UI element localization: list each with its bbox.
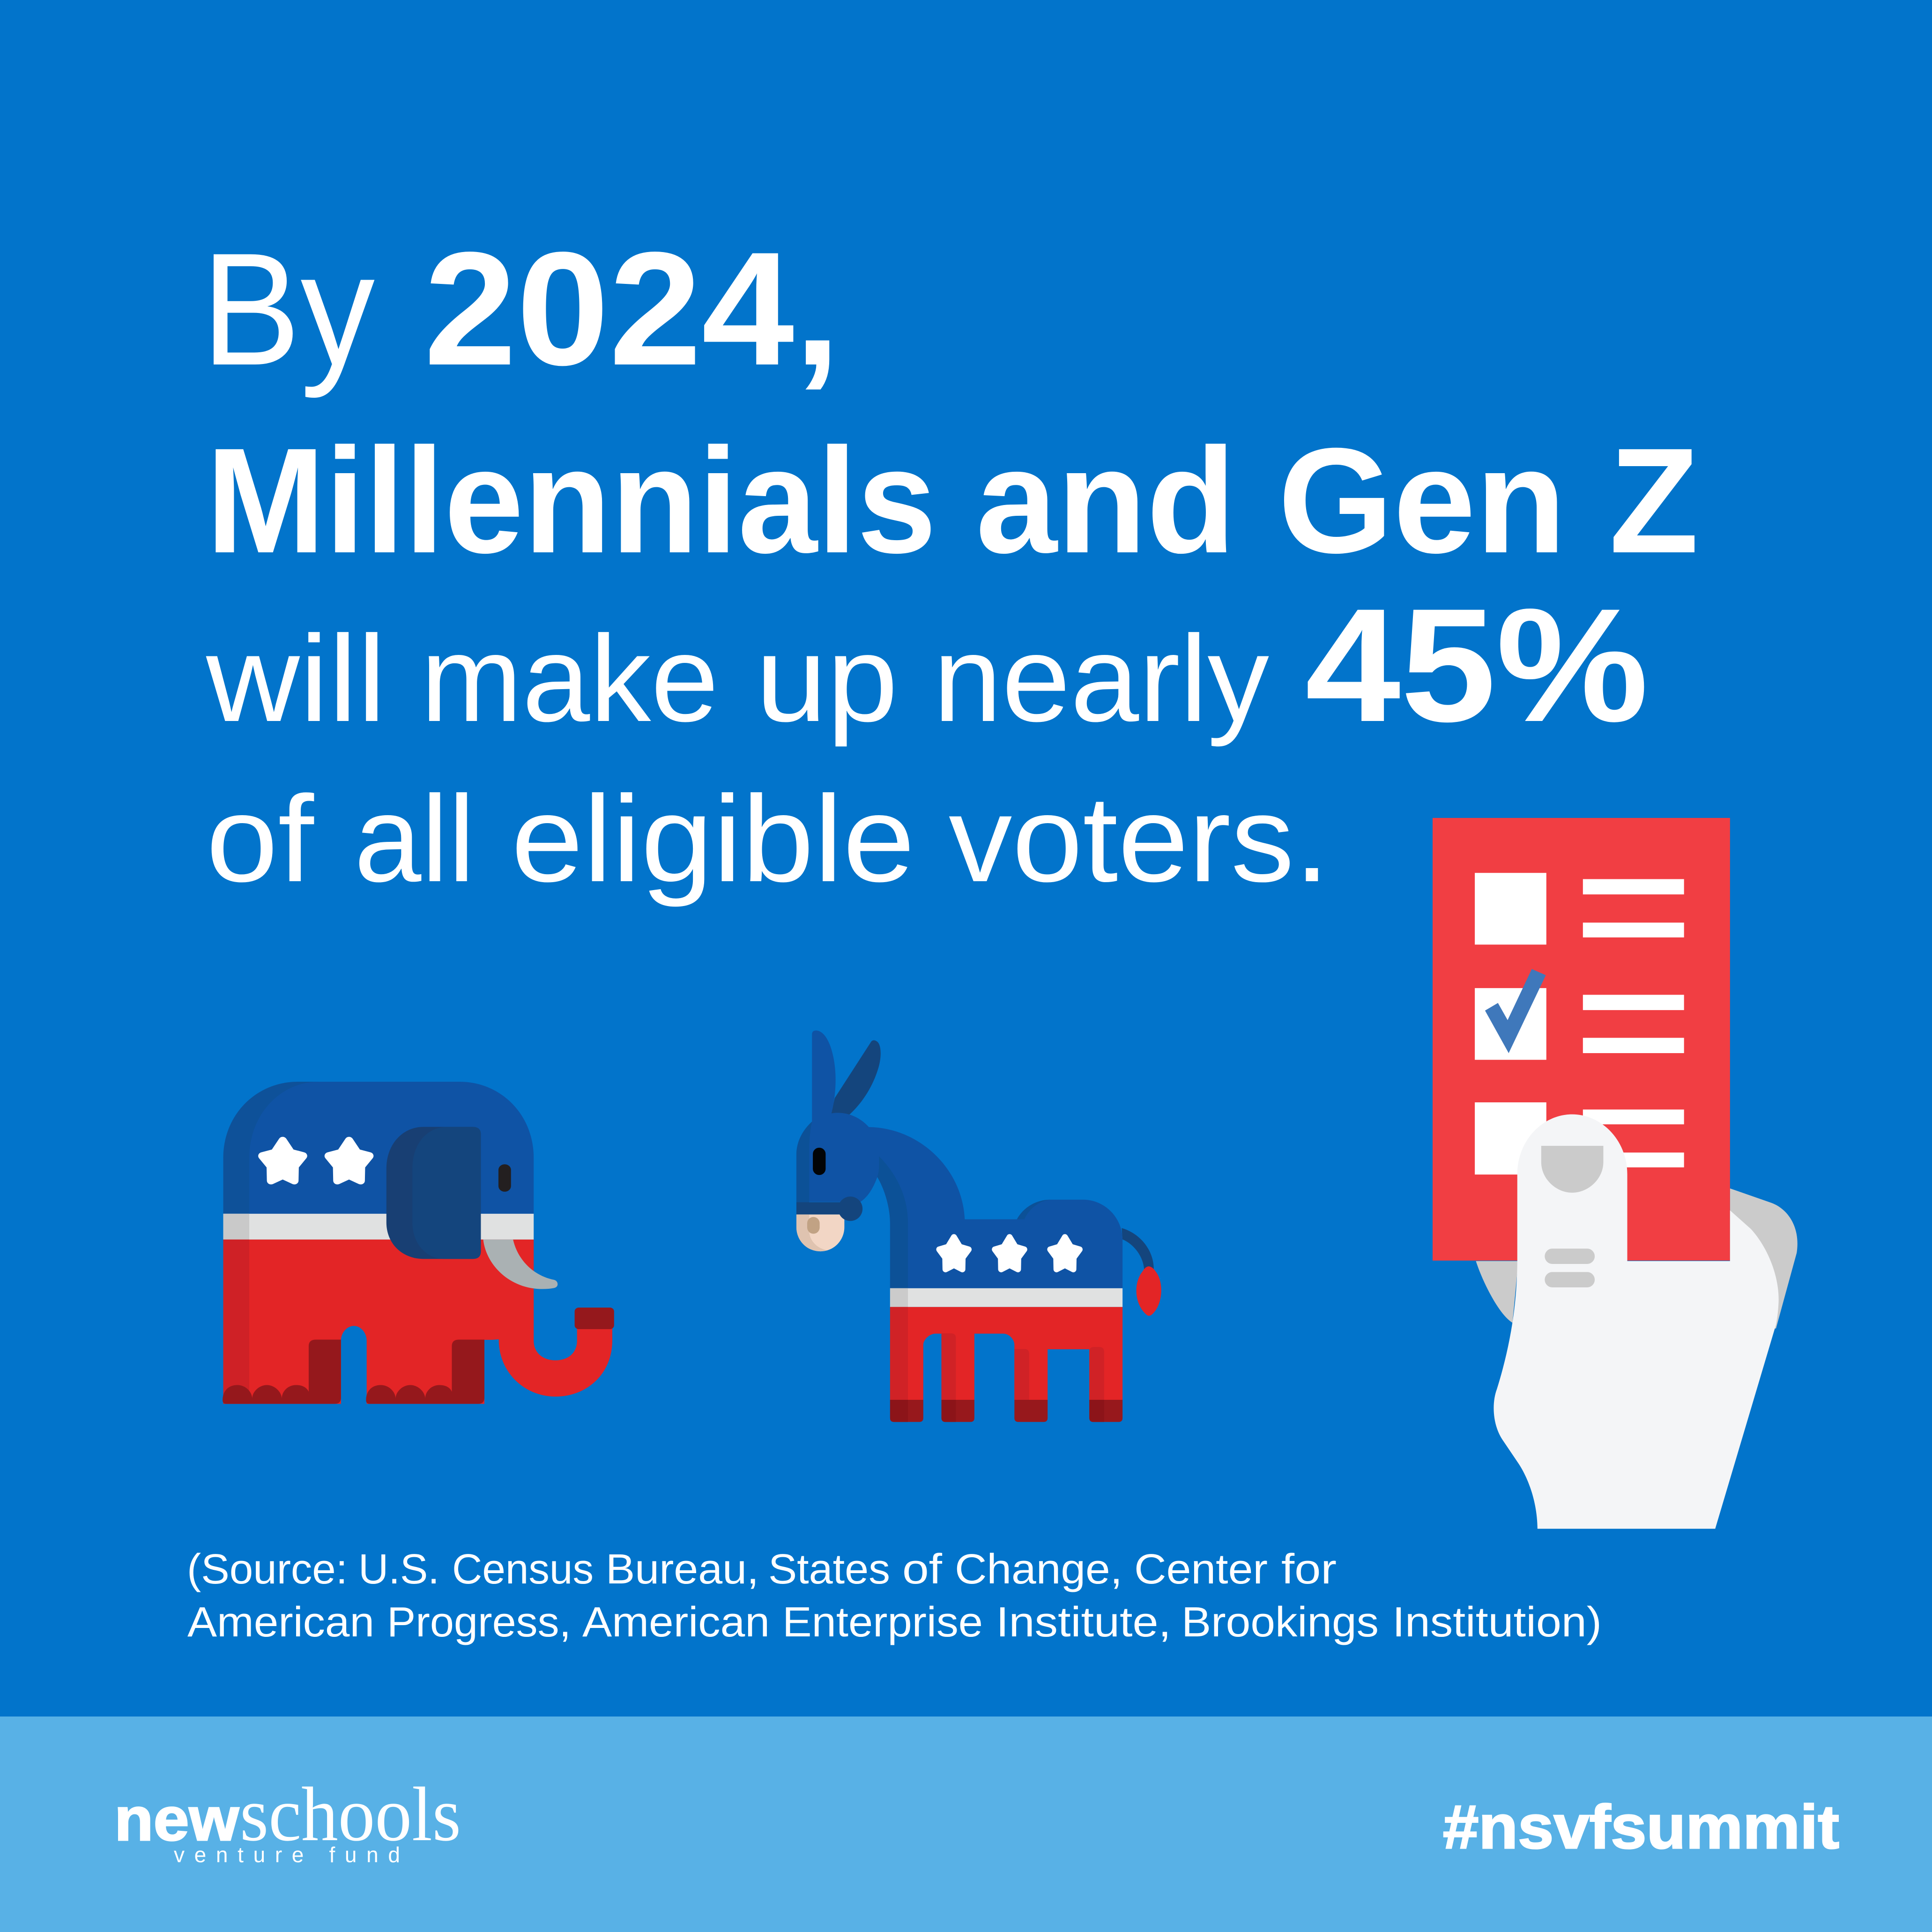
hand bbox=[1494, 1115, 1779, 1529]
headline line 4: eligible bbox=[511, 770, 915, 908]
source line 2: Institute, bbox=[996, 1599, 1171, 1646]
headline line 2: and bbox=[976, 416, 1236, 584]
headline line 3: 45% bbox=[1305, 575, 1649, 756]
source line 1: Bureau, bbox=[606, 1546, 759, 1593]
source line 1: U.S. bbox=[358, 1546, 439, 1593]
headline line 3: up bbox=[756, 610, 898, 748]
source line 2: Progress, bbox=[387, 1599, 571, 1646]
footer band bbox=[0, 1717, 1932, 1932]
source line 2: Brookings bbox=[1181, 1599, 1379, 1646]
headline line 4: all bbox=[354, 770, 475, 907]
headline line 2 bbox=[206, 416, 1699, 584]
source line 2: Enterprise bbox=[782, 1599, 983, 1646]
source note bbox=[187, 1546, 1602, 1646]
headline line 2: Millennials bbox=[206, 416, 936, 584]
source line 1: (Source: bbox=[187, 1546, 348, 1593]
headline line 2: Gen bbox=[1278, 416, 1566, 584]
source line 2 bbox=[187, 1599, 1602, 1646]
source line 1: for bbox=[1281, 1546, 1337, 1593]
headline line 4: of bbox=[206, 770, 314, 907]
headline line 3: will bbox=[204, 610, 386, 747]
logo: newschools venture fund: schools bbox=[240, 1771, 461, 1857]
ballot card bbox=[1433, 818, 1730, 1261]
source line 1 bbox=[187, 1546, 1337, 1593]
logo: newschools venture fund: venture fund bbox=[174, 1843, 400, 1867]
headline line 3: make bbox=[421, 610, 719, 747]
hashtag: #nsvfsummit bbox=[1443, 1792, 1839, 1861]
source line 1: States bbox=[768, 1546, 890, 1593]
source line 1: Census bbox=[452, 1546, 594, 1593]
source line 2: Institution) bbox=[1392, 1599, 1602, 1646]
source line 2: American bbox=[582, 1599, 770, 1646]
source line 2: American bbox=[187, 1599, 374, 1646]
headline bbox=[201, 219, 1699, 908]
source line 1: Change, bbox=[955, 1546, 1122, 1593]
headline line 4 bbox=[206, 770, 1330, 908]
headline line 1 bbox=[201, 219, 840, 400]
logo: newschools venture fund: new bbox=[114, 1784, 239, 1853]
source line 1: of bbox=[902, 1546, 943, 1593]
headline line 2: Z bbox=[1609, 416, 1699, 584]
headline line 4: voters. bbox=[949, 770, 1330, 907]
headline line 3: nearly bbox=[933, 610, 1269, 748]
headline line 1: 2024, bbox=[424, 219, 840, 399]
headline line 1: By bbox=[201, 220, 375, 400]
source line 1: Center bbox=[1134, 1546, 1268, 1593]
icon: hand holding ballot bbox=[1433, 818, 1798, 1529]
headline line 3 bbox=[204, 575, 1649, 756]
icon: republican elephant bbox=[223, 1082, 614, 1404]
icon: democratic donkey bbox=[796, 1031, 1161, 1422]
logo: newschools venture fund bbox=[114, 1771, 461, 1867]
